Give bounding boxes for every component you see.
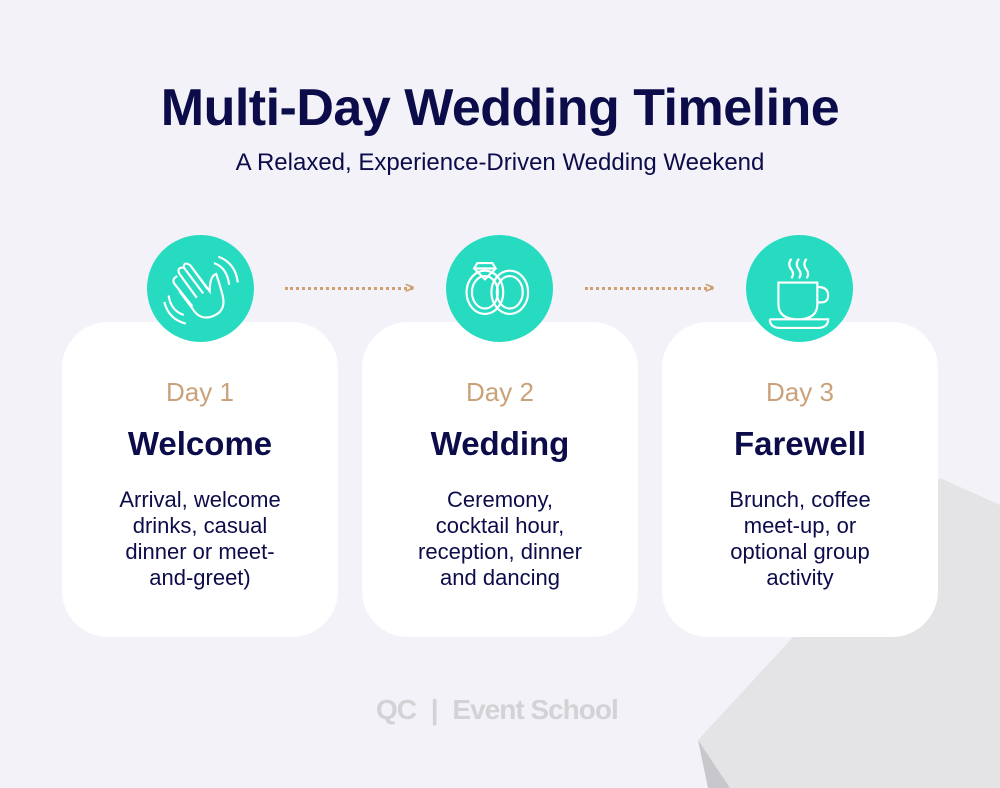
logo: QC | Event School bbox=[376, 694, 618, 725]
card: day 3: activity bbox=[766, 565, 834, 590]
card: day 1: drinks, casual bbox=[133, 513, 267, 538]
icon: rings bbox=[446, 235, 553, 342]
card: day 1: Day 1 bbox=[166, 377, 234, 407]
card: day 2: Ceremony, bbox=[447, 487, 553, 512]
card: day 2: Day 2 bbox=[466, 377, 534, 407]
card: day 3: meet-up, or bbox=[744, 513, 856, 538]
card: day 3: Farewell bbox=[734, 425, 866, 462]
icon: coffee cup bbox=[746, 235, 853, 342]
card: day 2: Wedding bbox=[431, 425, 569, 462]
card: day 3: Day 3 bbox=[766, 377, 834, 407]
card: day 2: and dancing bbox=[440, 565, 560, 590]
arrow 1 bbox=[285, 287, 413, 290]
card: day 1: dinner or meet- bbox=[125, 539, 275, 564]
card: day 2 bbox=[362, 322, 638, 637]
card: day 1 bbox=[62, 322, 338, 637]
card: day 3 bbox=[662, 322, 938, 637]
card: day 1: Welcome bbox=[128, 425, 272, 462]
subtitle: A Relaxed, Experience-Driven Wedding Weekend bbox=[236, 149, 764, 176]
text: > bbox=[405, 280, 414, 297]
card: day 2: reception, dinner bbox=[418, 539, 582, 564]
card: day 2: cocktail hour, bbox=[436, 513, 564, 538]
card: day 1: Arrival, welcome bbox=[119, 487, 281, 512]
card: day 3: Brunch, coffee bbox=[729, 487, 871, 512]
icon: waving hand bbox=[147, 235, 254, 342]
text: > bbox=[705, 280, 714, 297]
card: day 3: optional group bbox=[730, 539, 870, 564]
title: Multi-Day Wedding Timeline bbox=[161, 79, 839, 137]
arrow 2 bbox=[585, 287, 713, 290]
card: day 1: and-greet) bbox=[149, 565, 251, 590]
